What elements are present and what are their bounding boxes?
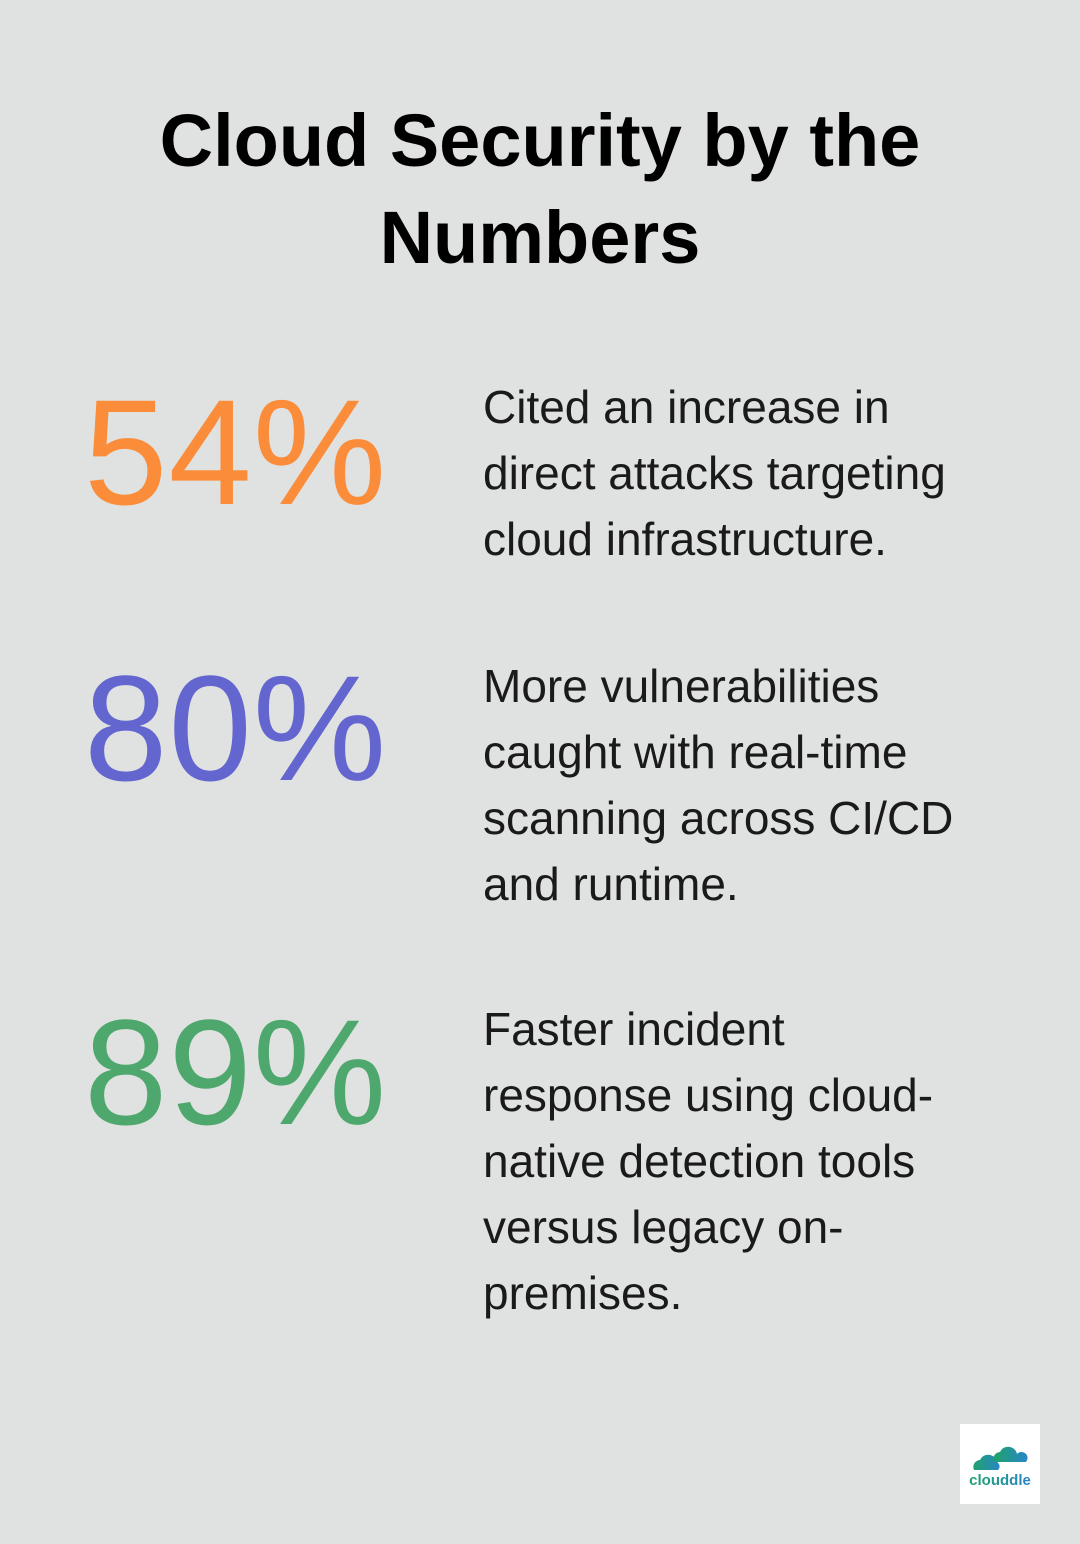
text: 80% description: and runtime.: [483, 858, 739, 910]
text: 80% description: [483, 660, 953, 910]
text: 54% description: cloud infrastructure.: [483, 513, 887, 565]
text: 80% description: scanning across CI/CD: [483, 792, 953, 844]
title: [160, 99, 920, 279]
text: 89% description: versus legacy on-: [483, 1201, 844, 1253]
text: 54% description: direct attacks targeting: [483, 447, 946, 499]
text: 89% description: premises.: [483, 1267, 682, 1319]
title: Cloud Security by the: [160, 99, 920, 182]
title: Numbers: [380, 196, 700, 279]
text: 80% description: caught with real-time: [483, 726, 907, 778]
stat: 54%: 54%: [84, 368, 387, 536]
stat: 80%: 80%: [84, 644, 387, 812]
text: 54% description: [483, 381, 946, 565]
stat: 89%: 89%: [84, 988, 387, 1156]
text: 54% description: Cited an increase in: [483, 381, 890, 433]
text: 89% description: response using cloud-: [483, 1069, 933, 1121]
text: 80% description: More vulnerabilities: [483, 660, 879, 712]
text: 89% description: Faster incident: [483, 1003, 785, 1055]
logo: clouddle: [960, 1424, 1040, 1504]
text: 89% description: native detection tools: [483, 1135, 915, 1187]
text: 89% description: [483, 1003, 933, 1319]
logo: clouddle: clouddle: [969, 1472, 1031, 1489]
